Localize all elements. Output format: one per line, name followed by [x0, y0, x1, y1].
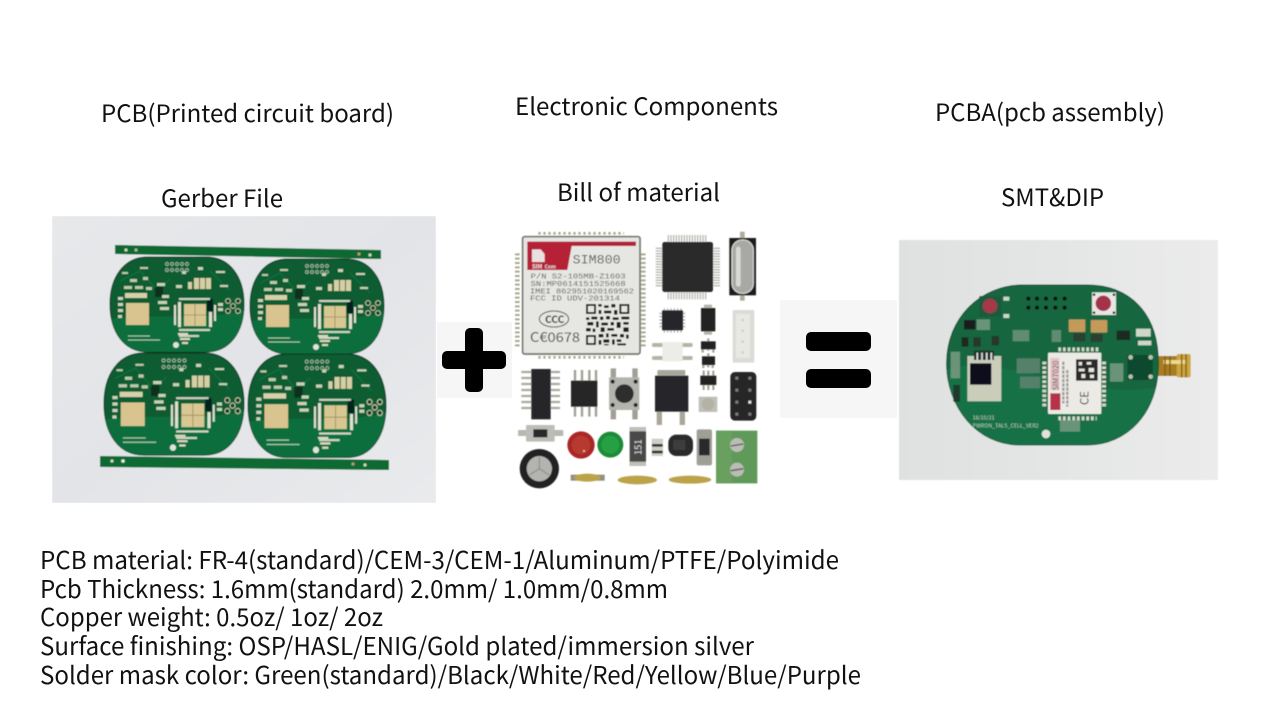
subheading: SMT and DIP: SMT&DIP [1001, 178, 1104, 213]
SOIC chip [521, 369, 560, 419]
left button [979, 296, 1009, 318]
gold capacitors [571, 474, 711, 484]
SIM800 module: Com [545, 263, 556, 270]
specification list [40, 542, 861, 692]
SIM800 module: C€0678 [530, 327, 580, 346]
subheading: Bill of material: Bill of material [557, 173, 720, 208]
QR code [586, 304, 629, 345]
SOT transistors [701, 338, 716, 368]
specification list: Copper weight: 0.5oz/ 1oz/ 2oz [40, 599, 383, 634]
small resistor array [652, 439, 663, 456]
plus sign [437, 322, 512, 398]
SIM800 module: SIM800 [573, 252, 621, 267]
SIM800 module: P/N S2-105MB-Z1603 [531, 273, 626, 281]
QFP chip [656, 235, 720, 299]
red LED [567, 431, 595, 459]
photo: bare PCB panel [52, 216, 436, 503]
SIM800 module: SN:MP0614151525668 [531, 281, 626, 289]
PCBA board [947, 285, 1158, 445]
potentiometer [520, 449, 559, 488]
heading: PCBA: PCBA(pcb assembly) [935, 93, 1165, 128]
crystal [729, 232, 756, 301]
SIM7020 module [1044, 349, 1104, 418]
SOP8 chip [571, 370, 597, 417]
green terminal block [716, 431, 757, 483]
bottom rail [100, 456, 389, 470]
heading: Electronic Components: Electronic Components [515, 87, 778, 122]
board bottom left [104, 353, 244, 455]
specification list: Surface finishing: OSP/HASL/ENIG/Gold plated/immersion silver [40, 628, 754, 663]
top rail [115, 245, 381, 259]
tantalum capacitors [1069, 319, 1107, 333]
SIM800 module: CCC [545, 311, 565, 326]
SIM800 module: IMEI 862951020169562 [530, 288, 634, 296]
specification list: Solder mask color: Green(standard)/Black/White/Red/Yellow/Blue/Purple [40, 657, 861, 692]
equals sign [780, 300, 897, 418]
inductor [668, 435, 693, 456]
right button [1092, 292, 1116, 315]
board bottom right [248, 354, 386, 458]
heading: PCB: PCB(Printed circuit board) [101, 94, 394, 129]
board top right [250, 259, 384, 354]
optocoupler [652, 342, 693, 361]
QFN with pads [967, 351, 1001, 401]
resistor 151: 151 [630, 439, 644, 455]
SMA connector [1157, 354, 1191, 377]
board silkscreen [973, 413, 1039, 429]
specification list: PCB material: FR-4(standard)/CEM-3/CEM-1/Aluminum/PTFE/Polyimide [40, 542, 839, 577]
SIM800 module: FCC ID UDV-201314 [530, 295, 620, 303]
axial fuse [697, 429, 712, 465]
components collage [517, 232, 757, 488]
SIM800 module: SIM [532, 261, 542, 270]
power regulator [655, 370, 688, 425]
pin holes [1026, 297, 1067, 310]
small silver switch [699, 397, 717, 412]
photo: assembled PCBA [899, 240, 1218, 480]
small QFN chip [659, 308, 685, 333]
subheading: Gerber File: Gerber File [161, 179, 283, 214]
white connector [733, 310, 754, 363]
board top left [110, 257, 244, 352]
green LED [597, 432, 623, 458]
small parts [951, 319, 1153, 432]
SIM7020 module: CE [1077, 391, 1093, 405]
SMD slide switch [518, 425, 563, 442]
pin header [730, 372, 756, 421]
SOT6 chip [700, 371, 716, 390]
board silkscreen: PWRON_TALS_CELL_VER2 [973, 421, 1039, 429]
board silkscreen: 18/10/21 [973, 413, 995, 421]
resistor 151 [630, 427, 646, 466]
tact switch [609, 368, 639, 419]
SIM7020 module: SIM7020 [1051, 360, 1062, 391]
diode [701, 305, 715, 335]
specification list: Pcb Thickness: 1.6mm(standard) 2.0mm/ 1.0mm/0.8mm [40, 571, 668, 606]
SIM800 module [517, 233, 643, 357]
